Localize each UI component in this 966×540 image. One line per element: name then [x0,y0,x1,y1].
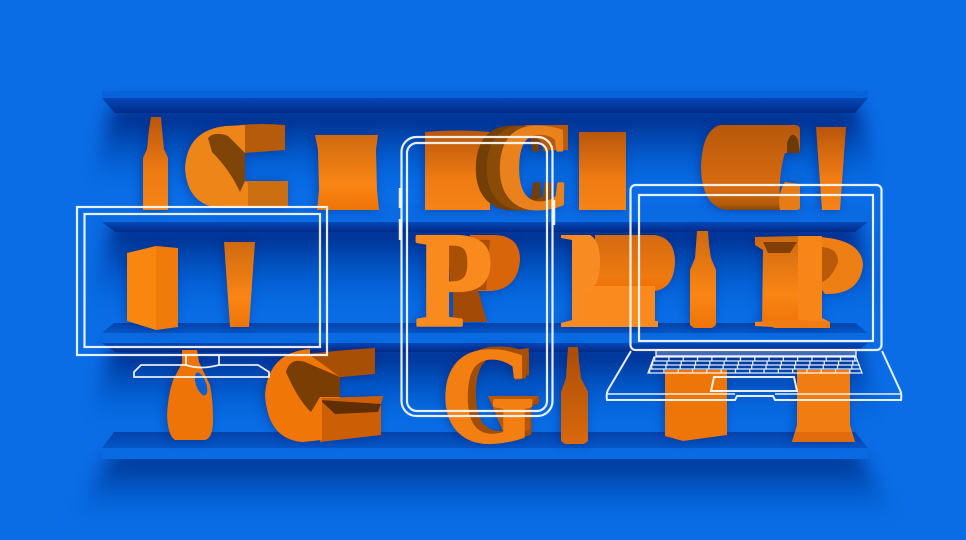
letter P side view [755,236,863,328]
shelf 2 underside [102,343,868,352]
monitor outline [77,207,327,377]
monitor stand [134,356,269,377]
shelf 2 front edge [102,333,868,343]
laptop base [607,351,901,400]
letter G front view: G [450,318,541,468]
tube [224,242,255,327]
box [579,132,626,210]
shelf 3 top surface [102,432,868,448]
box [425,130,490,210]
bottle [143,117,168,210]
pouch [315,135,379,210]
letter C front view: C [496,100,571,235]
laptop outline [607,185,901,400]
row 3 products [167,318,855,471]
soft shadows cast on the wall by the shelves [65,105,905,528]
phone outline [400,137,554,416]
letter C front view: C [472,100,547,235]
letter P front view: P [415,205,493,355]
bottle [561,347,588,444]
row 1 products [143,100,846,235]
keyboard [648,357,862,373]
letter G front view: G [441,320,534,471]
top shelf front edge [102,91,868,99]
top shelf underside [102,98,868,113]
box [665,370,727,441]
bottle [690,231,716,328]
letter L with cylinder [561,235,675,327]
letter G side view [265,348,383,442]
row 2 products [127,205,863,355]
letter C side view [185,124,288,208]
hinge [656,350,856,356]
phone buttons [400,188,554,240]
tube [816,127,846,210]
shelf 2 top surface [102,323,868,333]
trackpad [711,377,797,391]
shelf 1 underside [102,222,868,232]
shelf boards [102,91,868,459]
letter C front view: C [483,100,558,235]
pouch [792,370,855,442]
jug [167,350,213,440]
box [127,246,178,330]
shelf 3 front edge [102,448,868,459]
shelf 1 front edge [102,208,868,222]
letter C back view [701,125,800,210]
